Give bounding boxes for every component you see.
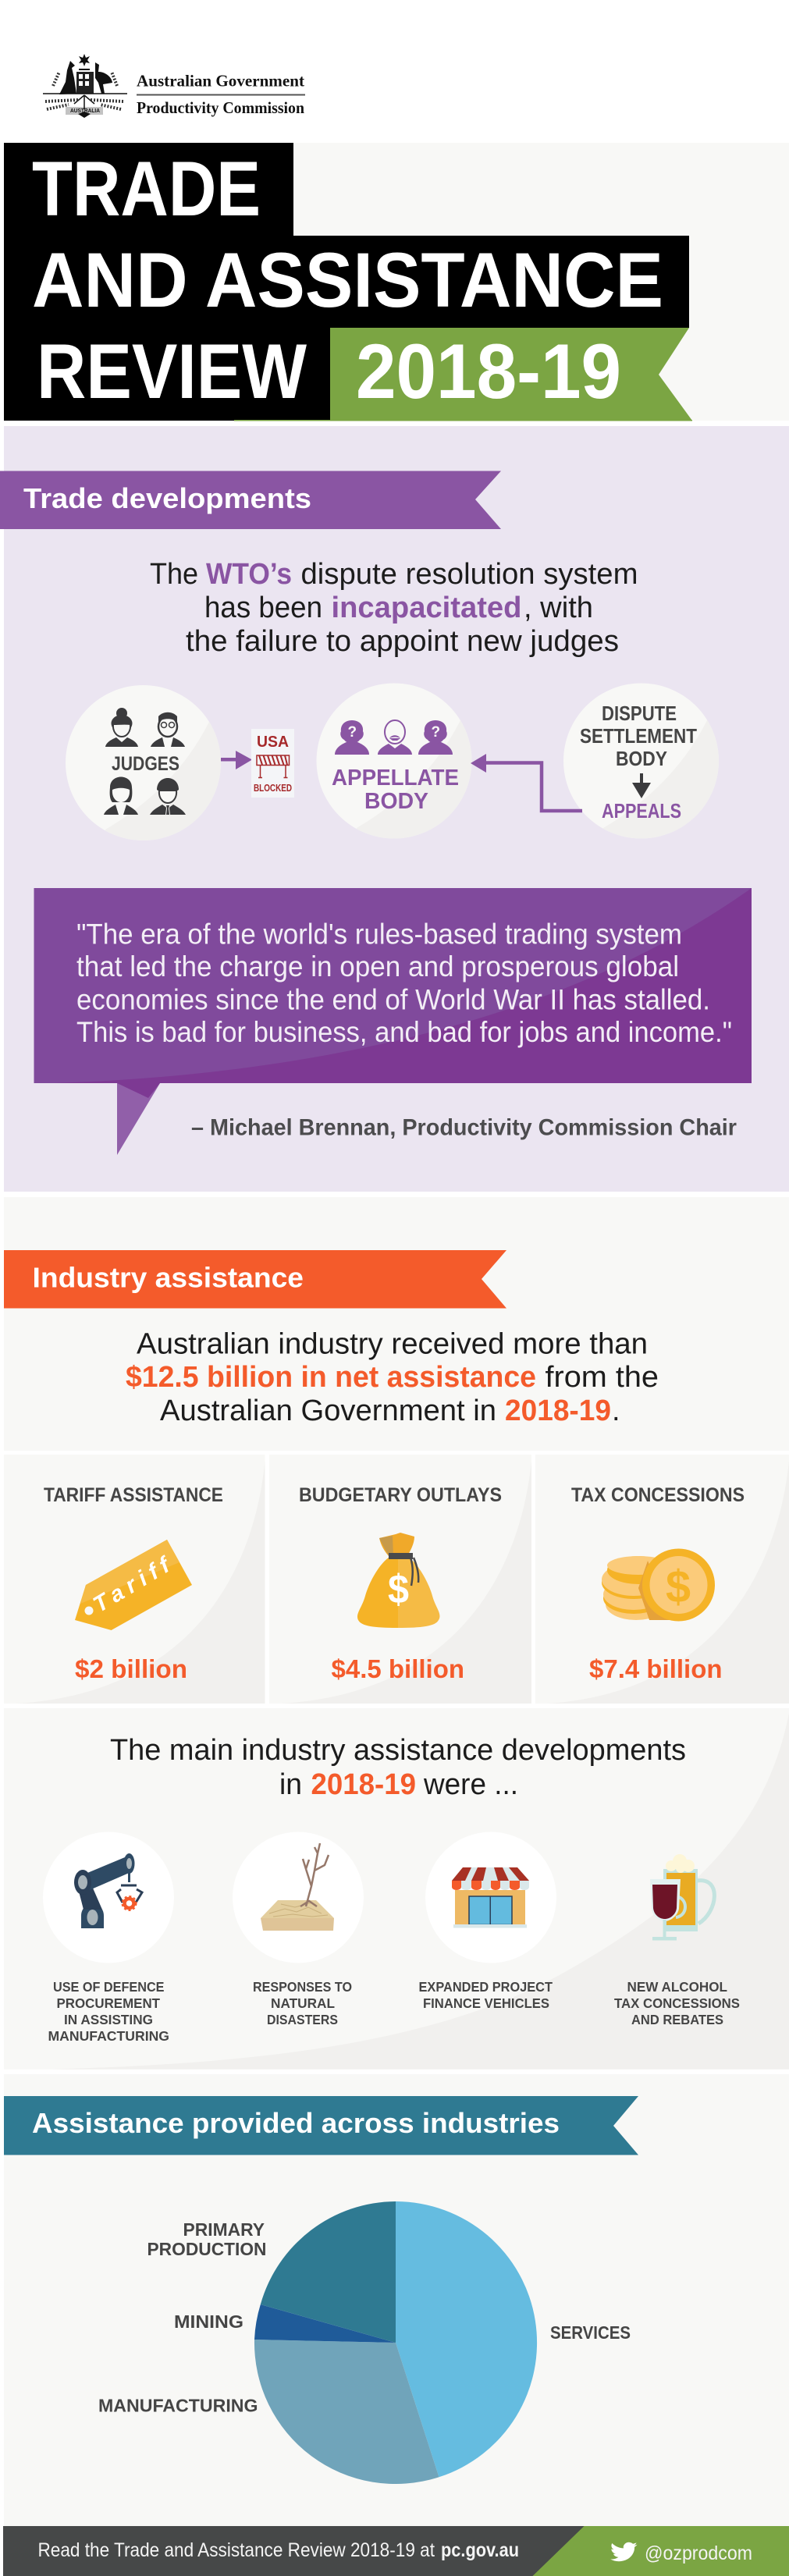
text block: net assistance: 2018-19 [505,1395,611,1427]
item: alcohol tax concessions: NEW ALCOHOL [627,1979,727,1995]
text block: quote text: that led the charge in open and prosperous global [76,950,679,982]
panel: budgetary outlays: BUDGETARY OUTLAYS [299,1484,502,1506]
text block: net assistance: Australian Government in [160,1395,496,1427]
item: natural disasters: RESPONSES TO [253,1979,352,1995]
panel: industry assistance [4,1197,789,1451]
text block: quote text: "The era of the world's rules-based trading system [76,918,682,950]
callout: quote [34,888,752,1155]
text block: WTO statement: The [150,558,198,591]
item: natural disasters: DISASTERS [267,2012,338,2027]
callout: USA blocked [251,729,294,798]
panel: main developments [4,1708,789,2070]
text block: WTO statement: incapacitated [331,592,521,624]
text block: developments heading [110,1734,686,1801]
panel: tax concessions: TAX CONCESSIONS [571,1484,745,1506]
item: project finance vehicles: EXPANDED PROJECT [418,1979,553,1995]
icon: money bag [357,1533,439,1628]
pie labels: PRIMARY [183,2219,265,2240]
icon: coins: $ [666,1562,691,1612]
text block: WTO statement: WTO’s [206,558,292,591]
text block: developments heading: The main industry assistance developments [110,1734,686,1767]
ribbon heading: Industry assistance [4,1250,506,1308]
icon: coat of arms: AUSTRALIA [70,108,100,114]
title: TRADE [32,145,261,232]
ribbon heading: Trade developments [0,471,501,529]
circle: dispute settlement body [563,684,719,838]
text block: quote text [76,918,732,1048]
icon: female judge [104,777,138,815]
icon: unknown judge right: ? [431,724,440,741]
panel: trade developments [0,426,789,1192]
icon: coins [602,1548,715,1622]
ribbon: year [330,328,692,421]
circle: dispute settlement body: SETTLEMENT [580,726,697,748]
text block: net assistance [126,1328,659,1427]
arrow: appeals to appellate body [471,754,582,811]
value: $4.5 billion [331,1654,464,1683]
icon: bald judge [378,720,412,755]
circle: dispute settlement body: DISPUTE [602,703,677,725]
item: alcohol tax concessions [614,1854,740,2027]
text block: attribution: – Michael Brennan, Productivity Commission Chair [191,1114,737,1141]
callout: USA blocked: BLOCKED [254,783,292,794]
text block: WTO statement: has been [204,592,322,624]
circle: judges: JUDGES [112,753,179,775]
text block: read the review: Read the Trade and Assistance Review 2018-19 at [37,2539,435,2561]
pie labels: SERVICES [550,2322,631,2343]
circle: appellate body [317,684,471,838]
value: $2 billion [75,1654,187,1683]
text block: WTO statement [150,558,638,658]
text block: quote text: economies since the end of World War II has stalled. [76,983,710,1016]
item: natural disasters: NATURAL [271,1995,335,2011]
ribbon heading: Assistance provided across industries [4,2096,638,2155]
item: defence procurement: USE OF DEFENCE [53,1979,164,1995]
text block: net assistance: from the [545,1361,659,1394]
panel: assistance across industries [4,2074,789,2526]
item: defence procurement [43,1832,174,2044]
ribbon heading: Trade developments: Trade developments [23,482,311,514]
item: project finance vehicles: FINANCE VEHICLES [423,1995,549,2011]
circle: dispute settlement body: APPEALS [602,801,681,823]
arrow: down [632,773,651,798]
panel: budgetary outlays [269,1455,531,1704]
icon: beer and wine [650,1854,714,1940]
pie labels: PRODUCTION [147,2239,267,2259]
text block: net assistance: Australian industry received more than [137,1328,648,1361]
circle: dispute settlement body: BODY [616,748,667,770]
title: 2018-19 [356,328,621,414]
icon: tariff tag [75,1540,192,1630]
text block: read the review: pc.gov.au [441,2539,519,2561]
arrow: judges to blocked [221,751,252,769]
circle: appellate body: BODY [364,789,428,814]
title [32,145,663,414]
title: AND ASSISTANCE [32,236,663,323]
footer [3,2526,789,2576]
item: project finance vehicles [418,1832,556,2011]
icon: barrier [257,755,289,777]
text block: WTO statement: dispute resolution system [301,558,638,591]
icon: shop [452,1867,529,1928]
ribbon heading: Industry assistance: Industry assistance [33,1261,304,1294]
pie labels: MINING [174,2311,243,2332]
icon: money bag: $ [388,1567,409,1612]
text block: developments heading: in [279,1768,302,1801]
ribbon heading: Assistance provided across industries: Assistance provided across industries [32,2107,560,2139]
icon: unknown judge left: ? [348,724,357,741]
title: REVIEW [37,328,307,414]
item: defence procurement: IN ASSISTING [64,2012,153,2027]
circle: judges [66,685,221,840]
pie labels [98,2219,631,2416]
icon: twitter bird [610,2542,638,2561]
text block: net assistance: . [612,1395,620,1427]
pie chart [254,2201,537,2484]
text block: net assistance: $12.5 billion in net assistance [126,1361,536,1394]
panel: tax concessions [535,1455,789,1704]
text block: developments heading: 2018-19 [311,1768,416,1801]
callout: USA blocked: USA [257,734,289,751]
icon: coat of arms [43,54,127,118]
text block: quote text: This is bad for business, and bad for jobs and income." [76,1016,732,1048]
text block: WTO statement: , with [524,592,593,624]
icon: tariff tag: Tariff [89,1551,176,1618]
item: alcohol tax concessions: TAX CONCESSIONS [614,1995,740,2011]
icon: unknown judge left [335,720,369,755]
item: alcohol tax concessions: AND REBATES [631,2012,723,2027]
icon: judge with glasses [151,712,185,747]
pie labels: MANUFACTURING [98,2396,258,2416]
twitter handle: @ozprodcom [645,2542,752,2564]
icon: dead tree on dry soil [261,1843,334,1931]
text block: developments heading: were ... [423,1768,518,1801]
logo: Australian Government Productivity Commission: Australian Government [137,72,304,91]
icon: male judge with tie [150,778,186,815]
logo: Australian Government Productivity Commission [43,54,305,118]
panel: tariff assistance [4,1455,265,1704]
text block: WTO statement: the failure to appoint new judges [186,625,619,658]
item: defence procurement: PROCUREMENT [56,1995,160,2011]
circle: appellate body: APPELLATE [332,766,459,791]
logo: Australian Government Productivity Commission: Productivity Commission [137,98,304,117]
value: $7.4 billion [589,1654,723,1683]
item: natural disasters [233,1832,364,2027]
panel: tariff assistance: TARIFF ASSISTANCE [44,1484,223,1506]
icon: robot arm [74,1853,142,1928]
item: defence procurement: MANUFACTURING [48,2028,169,2044]
icon: unknown judge right [418,720,453,755]
panel: title banner [4,143,789,421]
icon: judge with bun [105,708,138,747]
